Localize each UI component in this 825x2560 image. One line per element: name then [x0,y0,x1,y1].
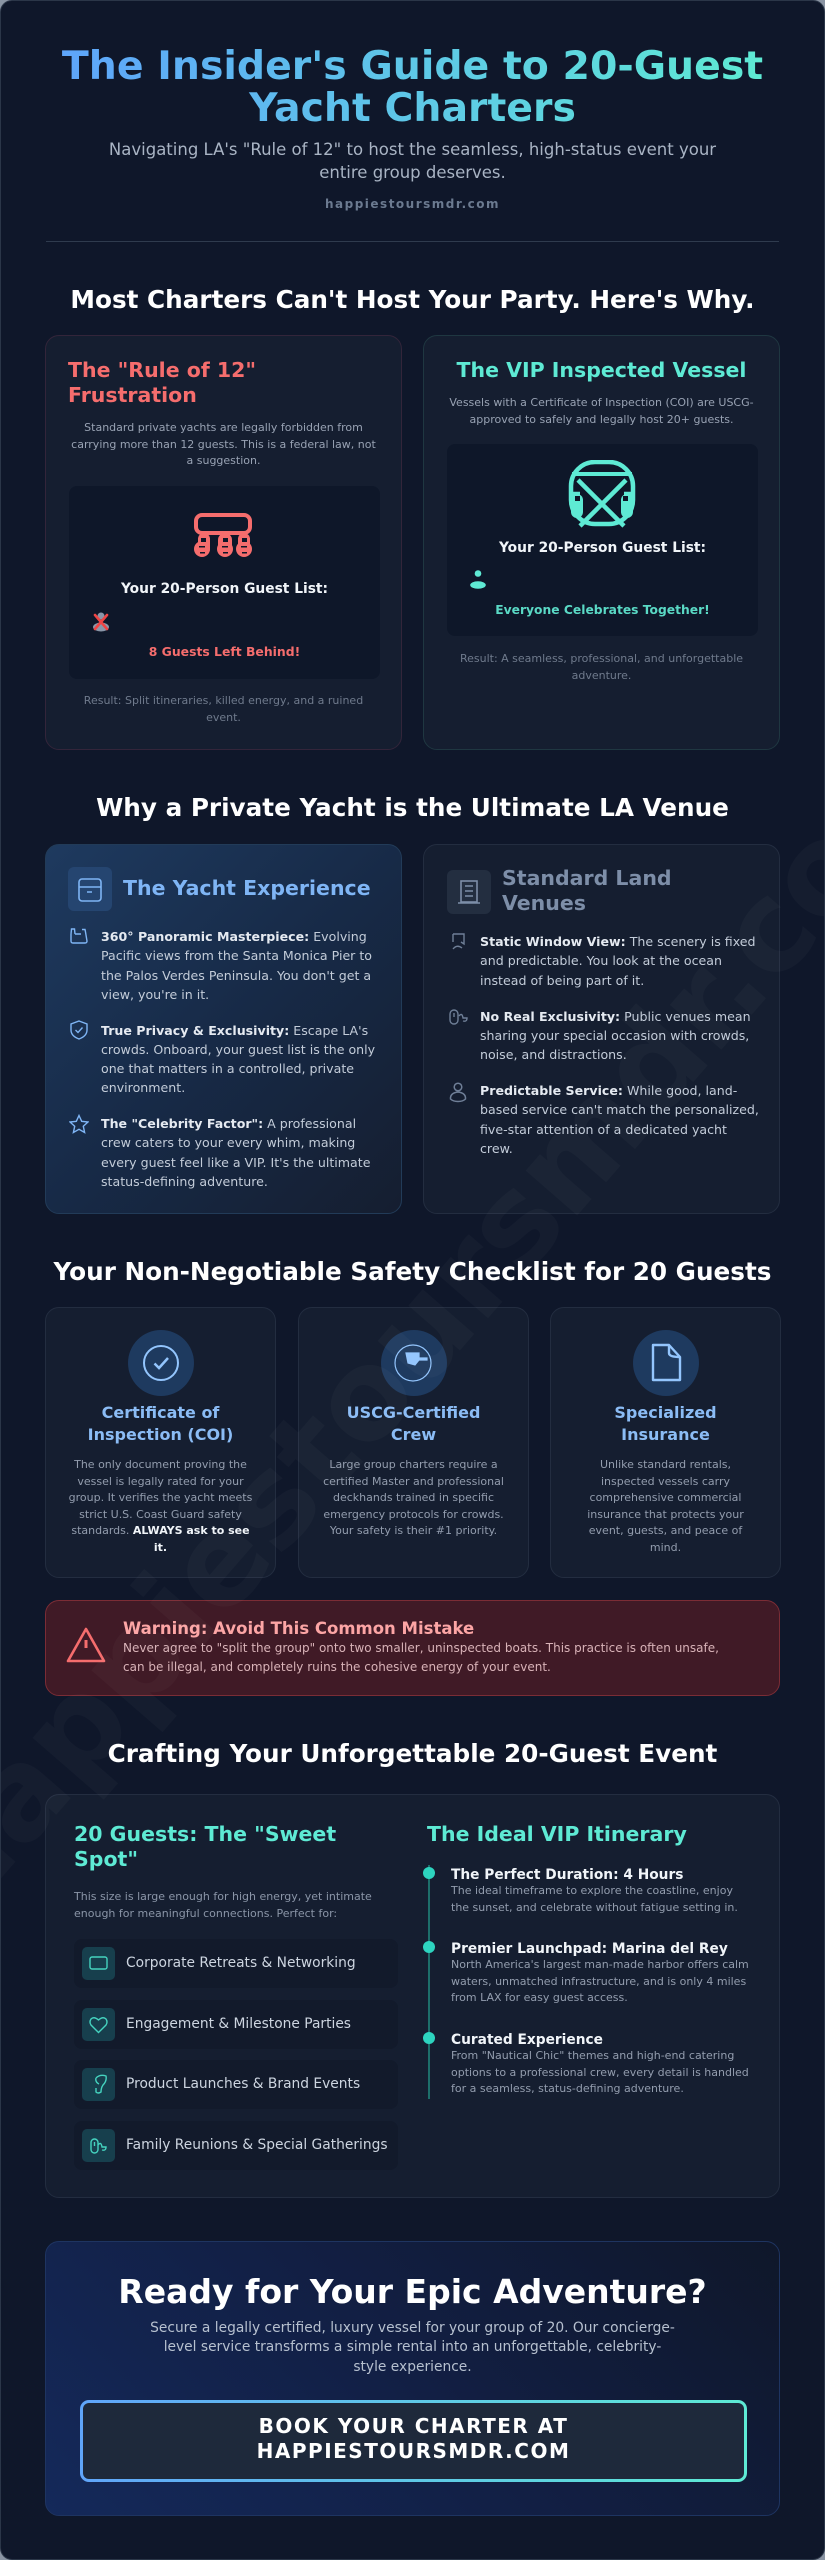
step: launchpad: North America's largest man-made harbor offers calm [451,1958,749,1971]
cta button: HAPPIESTOURSMDR.COM [257,2438,570,2462]
step: launchpad: waters, unmatched infrastructure, and is only 4 miles [451,1974,746,1988]
step: duration: The ideal timeframe to explore the coastline, enjoy [451,1884,733,1897]
step: launchpad: from LAX for easy guest access. [451,1991,628,2004]
left column heading: 20 Guests: The "Sweet [74,1822,336,1846]
card text: inspected vessels carry [601,1474,730,1488]
item: panoramic: view, you're in it. [101,987,209,1002]
cta button: BOOK YOUR CHARTER AT [259,2414,568,2438]
card text: Your safety is their #1 priority. [330,1524,497,1537]
warning title: Warning: Avoid This Common Mistake [123,1619,474,1638]
icon: shield [70,1020,88,1040]
title: Yacht Charters [249,85,576,131]
panel: land venues [423,844,780,1214]
celebrate note: Everyone Celebrates Together! [495,603,710,617]
item: privacy [101,1022,375,1095]
item: celebrity: crew caters to your every whim, making [101,1135,355,1150]
card title: Certificate of [102,1403,219,1422]
left column text: enough for meaningful connections. Perfect for: [74,1906,337,1920]
panel: crew [298,1307,529,1578]
card title: Inspection (COI) [88,1425,233,1444]
step: launchpad: Premier Launchpad: Marina del Rey [451,1941,728,1957]
card text [69,1458,252,1554]
result note: Result: Split itineraries, killed energy, and a ruined [84,694,363,707]
panel heading: land venues [502,866,672,915]
item: privacy: one that matters in a controlled, private [101,1061,354,1076]
result note: adventure. [572,668,631,682]
card title: Insurance [621,1425,710,1444]
step: duration [451,1867,738,1914]
step: launchpad [451,1941,749,2004]
step: curated: From "Nautical Chic" themes and high-end catering [451,2049,734,2062]
icon: large yacht [568,460,636,528]
card text: it. [154,1540,167,1554]
cta text [150,2320,675,2375]
panel heading: land venues: Standard Land [502,866,672,890]
card text: deckhands trained in specific [333,1491,494,1504]
card text: standards. ALWAYS ask to see [71,1524,250,1537]
step: duration: The Perfect Duration: 4 Hours [451,1867,683,1883]
cta text: level service transforms a simple rental into an unforgettable, celebrity- [164,2339,661,2355]
item: celebrity: The "Celebrity Factor": A professional [101,1116,356,1131]
result note [460,652,743,682]
icon: excluded guest [93,612,109,632]
row: corporate [74,1939,398,1988]
card title [88,1403,233,1444]
row: launches: Product Launches & Brand Events [126,2076,360,2092]
item: celebrity [101,1116,370,1189]
description [71,421,376,467]
row: engagement [74,2000,398,2049]
card text [323,1458,504,1537]
item: exclusivity: sharing your special occasion with crowds, [480,1028,749,1043]
list label: Your 20-Person Guest List: [121,581,328,597]
card title [347,1403,480,1444]
card text: strict U.S. Coast Guard safety [79,1508,242,1520]
panel heading: yacht: The Yacht Experience [123,876,371,900]
cta text: Secure a legally certified, luxury vessel for your group of 20. Our concierge- [150,2320,675,2336]
cta heading: Ready for Your Epic Adventure? [118,2272,707,2311]
icon box: yacht [68,867,112,911]
warning text: can be illegal, and completely ruins the cohesive energy of your event. [123,1660,551,1674]
panel: coi [45,1307,276,1578]
cta text: style experience. [353,2359,472,2375]
title [62,43,763,131]
description: Standard private yachts are legally forbidden from [84,421,363,434]
icon box: building [447,870,491,914]
step: curated: options to a professional crew, every detail is handled [451,2066,749,2078]
card text: Unlike standard rentals, [600,1458,731,1471]
panel: rule of 12 [45,335,402,750]
result note [84,694,363,724]
icon: window [452,933,465,950]
icon: crowd [449,1009,468,1025]
row: reunions: Family Reunions & Special Gatherings [126,2137,388,2153]
card text: group. It verifies the yacht meets [69,1491,252,1504]
left column heading: Spot" [74,1847,138,1871]
card title: Specialized [614,1403,717,1422]
item: static view: instead of being part of it. [480,973,644,988]
left behind note: 8 Guests Left Behind! [149,644,300,659]
row: corporate: Corporate Retreats & Networking [126,1955,356,1971]
row: reunions [74,2121,398,2170]
step: duration: the sunset, and celebrate without fatigue setting in. [451,1900,738,1914]
heading: crafting event: Crafting Your Unforgettable 20-Guest Event [108,1739,717,1768]
step: curated: for a seamless, status-defining adventure. [451,2082,684,2095]
panel heading: rule of 12: Frustration [68,383,197,407]
domain label: happiestoursmdr.com [325,197,500,211]
item: service: crew. [480,1141,513,1156]
item: panoramic: Pacific views from the Santa Monica Pier to [101,948,372,963]
icon: star [69,1114,89,1134]
row: engagement: Engagement & Milestone Parties [126,2016,351,2032]
row: launches [74,2060,398,2109]
item: static view [480,934,756,988]
item: privacy: True Privacy & Exclusivity: Escape LA's [101,1022,368,1038]
item: static view: Static Window View: The scenery is fixed [480,934,756,949]
card text: insurance that protects your [587,1508,744,1520]
list label: Your 20-Person Guest List: [499,540,706,556]
subtitle: Navigating LA's "Rule of 12" to host the seamless, high-status event your [109,140,716,159]
warning callout [45,1600,780,1696]
description: approved to safely and legally host 20+ guests. [470,412,734,426]
panel: insurance [550,1307,781,1578]
panel: yacht experience [45,844,402,1214]
right column heading: The Ideal VIP Itinerary [427,1822,687,1846]
card text: comprehensive commercial [590,1491,741,1504]
icon: small yacht [194,513,252,557]
item: privacy: crowds. Onboard, your guest list is the only [101,1042,375,1057]
card text: Large group charters require a [329,1458,498,1471]
call to action panel [45,2241,780,2516]
item: privacy: environment. [101,1080,185,1095]
card title: Crew [391,1425,436,1444]
card text: emergency protocols for crowds. [323,1508,504,1520]
warning text [123,1641,719,1674]
timeline [423,1865,435,2099]
card text: certified Master and professional [323,1474,504,1488]
icon: document [633,1330,699,1396]
item: panoramic: 360° Panoramic Masterpiece: Evolving [101,929,367,944]
card text: vessel is legally rated for your [77,1474,244,1488]
card text [587,1458,744,1554]
left column text: This size is large enough for high energy, yet intimate [74,1890,372,1903]
description: carrying more than 12 guests. This is a federal law, not [71,438,376,450]
item: celebrity: status-defining adventure. [101,1174,268,1189]
panel: vip vessel [423,335,780,750]
item: panoramic [101,929,372,1002]
icon: guest [470,570,486,589]
card title [614,1403,717,1444]
item: service: Predictable Service: While good, land- [480,1083,737,1098]
left column heading [74,1822,336,1871]
card text: event, guests, and peace of [589,1524,742,1537]
step: curated [451,2032,749,2095]
result note: Result: A seamless, professional, and unforgettable [460,652,743,665]
icon: warning triangle [66,1628,106,1662]
panel heading: vip vessel: The VIP Inspected Vessel [457,358,746,382]
step: curated: Curated Experience [451,2032,603,2048]
card text: The only document proving the [74,1458,247,1471]
item: service: based service can't match the personalized, [480,1102,759,1117]
left column text [74,1890,372,1920]
item: exclusivity: noise, and distractions. [480,1047,627,1062]
item: service: five-star attention of a dedicated yacht [480,1122,727,1137]
subtitle [109,140,716,182]
heading: safety checklist: Your Non-Negotiable Safety Checklist for 20 Guests [54,1257,771,1286]
panel: event planning [45,1794,780,2198]
subtitle: entire group deserves. [319,162,506,182]
cta button [80,2400,747,2482]
item: exclusivity: No Real Exclusivity: Public venues mean [480,1008,751,1024]
item: service [480,1083,759,1156]
warning text: Never agree to "split the group" onto two smaller, uninspected boats. This practice is often unsafe, [123,1641,719,1655]
panel heading: land venues: Venues [502,891,586,915]
heading: most charters: Most Charters Can't Host Your Party. Here's Why. [70,285,755,314]
icon: captain [381,1330,447,1396]
icon: person [450,1082,466,1102]
card text: mind. [650,1540,681,1554]
item: static view: and predictable. You look at the ocean [480,953,722,968]
result note: event. [206,710,241,724]
description: a suggestion. [186,454,260,467]
item: panoramic: the Palos Verdes Peninsula. You don't get a [101,968,371,983]
description: Vessels with a Certificate of Inspection (COI) are USCG- [449,396,754,409]
panel heading: rule of 12: The "Rule of 12" [68,358,256,382]
icon: panorama [70,928,88,944]
heading: why a yacht: Why a Private Yacht is the Ultimate LA Venue [96,793,729,822]
item: exclusivity [480,1008,751,1062]
item: celebrity: every guest feel like a VIP. It's the ultimate [101,1155,370,1170]
guest list box [69,486,380,679]
guest list box [447,444,758,636]
card title: USCG-Certified [347,1403,480,1422]
icon: check circle [128,1330,194,1396]
description [449,396,754,426]
title: The Insider's Guide to 20-Guest [62,43,763,89]
panel heading: rule of 12 [68,358,256,407]
